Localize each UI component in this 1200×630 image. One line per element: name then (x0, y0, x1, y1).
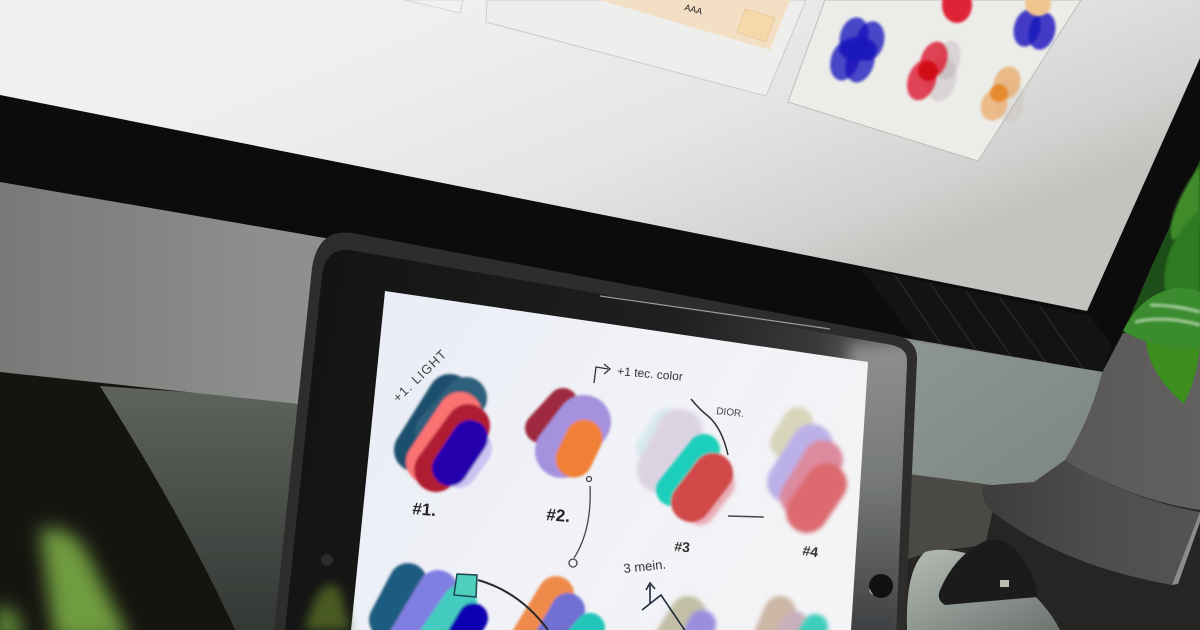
swatch square (737, 9, 775, 42)
colour study 3 (652, 424, 720, 510)
pot base (982, 460, 1200, 585)
tablet screen (351, 291, 868, 630)
bezel highlight line (600, 296, 830, 329)
colour study 2 (540, 403, 584, 459)
monitor chin (0, 182, 1120, 486)
tablet camera (321, 554, 333, 566)
charging dock (939, 540, 1038, 605)
lower leaf (1146, 342, 1200, 404)
colour study 7 (672, 614, 702, 630)
arrow to accent note (594, 364, 610, 383)
tablet bezel (285, 250, 907, 630)
wooden desk strip (905, 472, 1000, 560)
label #4: #4 (802, 542, 819, 560)
on-screen card: overlapping colour ellipses (788, 0, 1081, 161)
monitor black bezel (0, 58, 1200, 372)
sketch box on study 7 (642, 583, 688, 630)
handwritten note: Dior: DIOR. (716, 406, 744, 420)
base highlight (1172, 512, 1200, 585)
handwritten note: +1 light: +1. LIGHT (390, 346, 450, 405)
colour study 6 (528, 594, 590, 630)
second blue ellipses (1010, 6, 1059, 53)
red ellipses (902, 38, 965, 105)
on-screen card: AAA swatch (486, 0, 806, 96)
keyboard reflection in bezel (860, 268, 1112, 372)
blurred plant by tablet corner (305, 585, 350, 630)
colour study 8 (768, 612, 815, 630)
plant pot (982, 333, 1200, 585)
colour study 1 (416, 396, 472, 470)
desk surface (900, 470, 1200, 630)
computer mouse (907, 550, 1060, 630)
blue ellipses (825, 14, 889, 86)
AAA label: AAA (683, 2, 703, 17)
dash between studies 3 and 4 (728, 516, 764, 517)
label #1: #1. (412, 499, 437, 520)
bracket for DIOR note (691, 399, 728, 455)
handwritten note: +1 tec. color: +1 tec. color (617, 364, 683, 384)
swatch square with connector (454, 574, 548, 630)
on-screen card: fragment left (405, 0, 463, 13)
colour study 5 (388, 582, 473, 630)
tablet bezel right side (842, 338, 907, 630)
top orange ellipse (1025, 0, 1051, 16)
monitor stand (100, 386, 300, 630)
colour study 4 (785, 422, 826, 512)
handwritten note: 3 mein: 3 mein. (623, 557, 667, 576)
tablet home button (869, 574, 893, 598)
monitor screen (0, 0, 1200, 311)
plant leaves (1123, 160, 1200, 404)
orange ellipses (976, 63, 1025, 124)
large striped leaf (1123, 288, 1200, 349)
label #3: #3 (674, 538, 691, 555)
top red ellipse (942, 0, 972, 23)
blurred foreground plant (0, 528, 130, 630)
label #2: #2. (546, 505, 571, 526)
tablet case (274, 232, 917, 630)
hand-drawn connector between studies (569, 476, 592, 567)
